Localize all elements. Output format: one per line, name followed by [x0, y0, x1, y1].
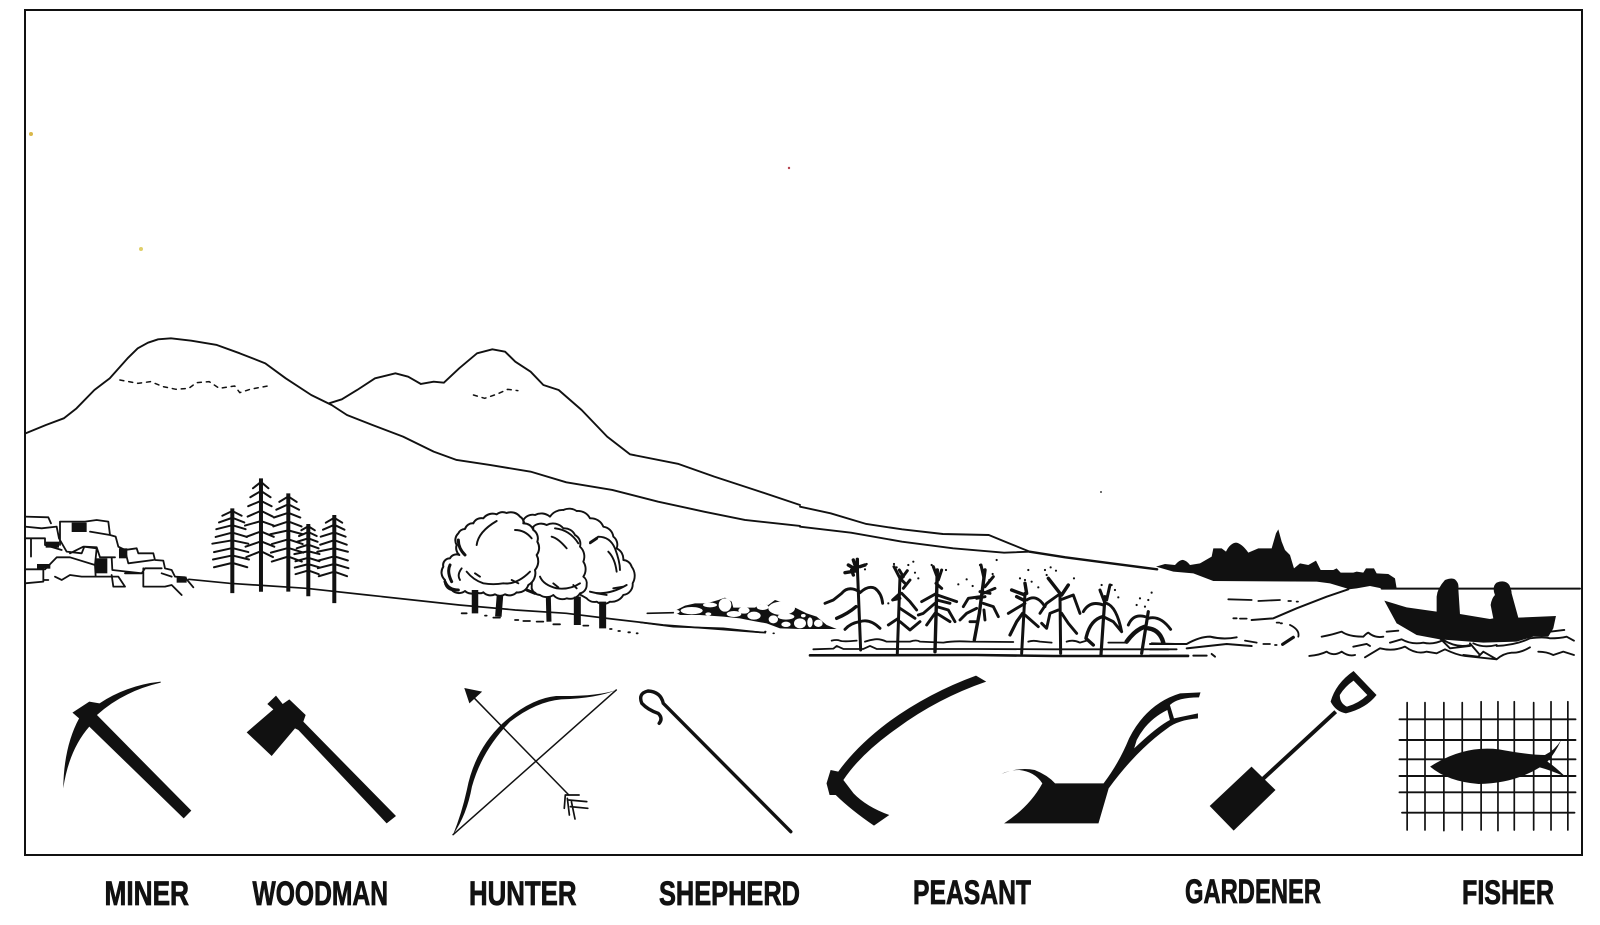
icon: shepherd's crook [641, 691, 791, 832]
tools: right half [827, 671, 1576, 831]
maize field [810, 559, 1188, 656]
label: peasant: PEASANT [913, 874, 1031, 912]
occupation labels [104, 873, 1554, 913]
label: woodman: WOODMAN [252, 875, 388, 913]
ridge continuation [800, 507, 1157, 569]
trunks [475, 590, 500, 617]
icon: fish in net [1399, 702, 1576, 831]
label: hunter: HUNTER [469, 875, 576, 913]
ground dots [462, 613, 638, 633]
maize plant 4 [960, 565, 998, 640]
maize plant 2 [888, 567, 920, 653]
icon: woodman's axe [247, 696, 396, 823]
foothill ground line [189, 579, 765, 633]
icon: miner's pick [63, 682, 191, 818]
icon: peasant's scythe [827, 676, 986, 826]
sea horizon [1382, 588, 1580, 590]
label: shepherd: SHEPHERD [659, 875, 800, 913]
middle crown [532, 523, 587, 599]
maize plant 7 [1083, 585, 1122, 655]
icon: gardener's spade [1210, 671, 1377, 831]
mine: rocky outcrop [25, 517, 193, 595]
label: fisher: FISHER [1462, 874, 1554, 912]
tools: left half [63, 682, 791, 835]
label: gardener: GARDENER [1185, 873, 1321, 911]
icon: hunter's bow and arrow [453, 688, 616, 835]
water ripples [1309, 630, 1574, 659]
snow lines [120, 380, 518, 398]
maize plant 6 [1040, 578, 1080, 653]
shoreline [1150, 589, 1348, 657]
front crown [442, 512, 539, 596]
oak trees [442, 509, 638, 633]
maize plant 8 [1127, 612, 1171, 653]
maize plant 1 [825, 559, 883, 650]
maize pollen dots [865, 560, 1152, 607]
crown inner shading [459, 521, 627, 595]
icon: plough [1002, 692, 1201, 823]
boat with two figures [1384, 578, 1556, 643]
field furrows [810, 639, 1188, 656]
mine and pine forest [25, 478, 348, 603]
town, shore, boat and sea [1150, 529, 1580, 659]
town silhouette [1156, 529, 1397, 589]
far mountain ridge [329, 349, 800, 505]
maize plant 3 [918, 567, 957, 652]
maize plant 5 [1008, 583, 1045, 653]
label: miner: MINER [104, 875, 189, 913]
near mountain ridge [26, 338, 800, 526]
landscape: mountains and foothills [26, 338, 800, 633]
pine forest [212, 478, 348, 603]
sheep pasture: rocks and bushes [640, 598, 837, 633]
back crown [523, 509, 635, 604]
